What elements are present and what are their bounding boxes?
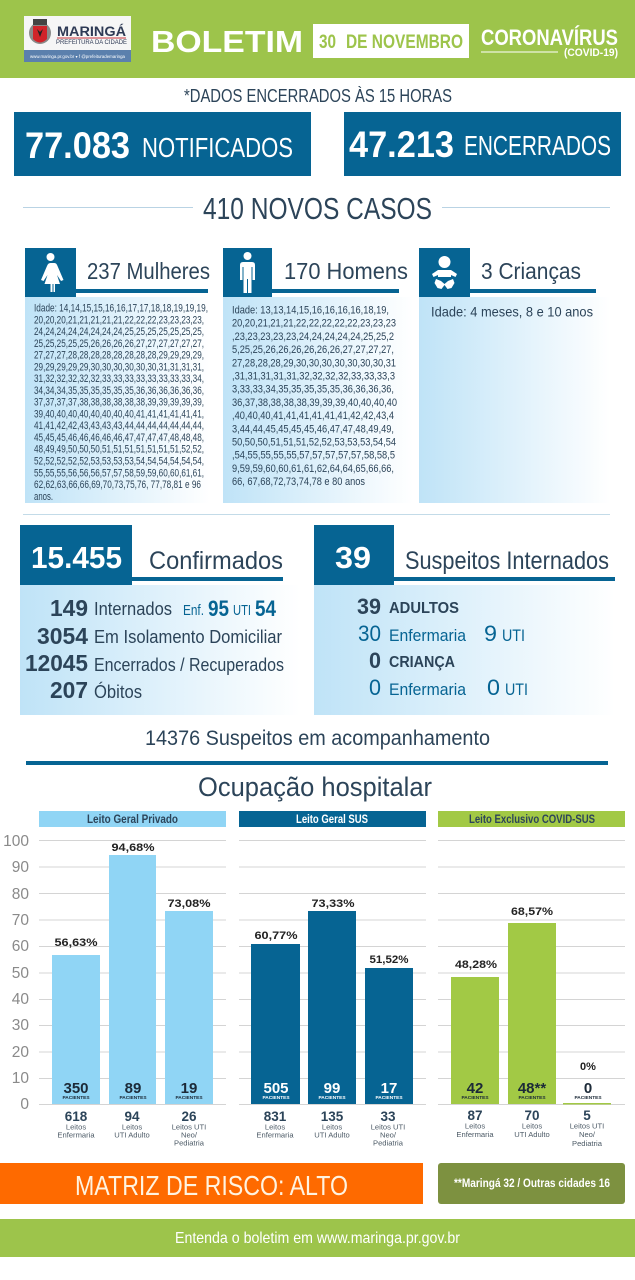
text: ages of women: 20,20,20,21,21,21,21,21,22,22,22,23,23,23,23, (34, 314, 204, 326)
chart axis labels: 10 (12, 1070, 29, 1087)
chart: leito exclusivo COVID-SUS: 48** (518, 1080, 546, 1097)
chart: leito geral SUS: 73,33% (312, 898, 355, 910)
text: ages of men: 5,25,25,26,26,26,26,26,26,27,27,27,27, (232, 344, 394, 356)
panel: crianças (419, 248, 610, 503)
chart: leito geral privado: Leitos (66, 1122, 86, 1132)
chart axis labels: 100 (3, 833, 29, 850)
chart: leito exclusivo COVID-SUS: Neo/ (579, 1130, 596, 1139)
row: criança: 0 (369, 648, 381, 673)
panel: encerrados: 47.213 (349, 124, 454, 165)
panel: confirmados (20, 525, 300, 715)
chart: leito exclusivo COVID-SUS (438, 811, 625, 1148)
chart: leito geral privado: 618 (65, 1109, 88, 1124)
chart axis labels: 20 (12, 1044, 29, 1061)
chart: leito exclusivo COVID-SUS: UTI Adulto (514, 1130, 550, 1139)
icon: baby (432, 256, 457, 289)
text: ages of men: 27,28,28,28,29,30,30,30,30,30,30,30,31 (232, 357, 396, 369)
text: ages of men (232, 304, 397, 488)
chart: leito geral privado: Enfermaria (57, 1130, 95, 1140)
coronavirus label: (COVID-19) (564, 47, 618, 59)
chart: leito geral privado: Neo/ (181, 1130, 198, 1140)
chart: leito geral SUS: 135 (321, 1109, 344, 1124)
row: internados: UTI (233, 602, 251, 619)
row: criança enfermaria e UTI: 0 (369, 675, 381, 700)
logo: Prefeitura de Maringá: PREFEITURA DA CIDADE (56, 39, 127, 46)
chart: leito geral SUS: Pediatria (373, 1138, 404, 1148)
logo: Prefeitura de Maringá (24, 16, 131, 62)
chart axis labels: 70 (12, 912, 29, 929)
row: criança enfermaria e UTI: Enfermaria (389, 680, 467, 699)
chart: leito geral SUS: Neo/ (380, 1130, 397, 1140)
row: adultos enfermaria e UTI: 30 (358, 621, 381, 646)
row: criança (369, 648, 455, 673)
row: internados: 149 (50, 595, 88, 621)
chart: leito exclusivo COVID-SUS: 68,57% (511, 906, 553, 918)
chart: leito geral SUS: Enfermaria (256, 1130, 294, 1140)
text: ages of men: ,23,23,23,23,23,24,24,24,24,24,25,25,2 (232, 331, 394, 343)
note: data closing time: *DADOS ENCERRADOS ÀS 15 HORAS (184, 86, 452, 106)
heading: 237 mulheres: 237 Mulheres (87, 258, 210, 284)
row: adultos enfermaria e UTI: UTI (502, 626, 525, 645)
row: adultos: 39 (357, 594, 381, 619)
chart: leito exclusivo COVID-SUS: Enfermaria (456, 1130, 494, 1139)
coronavirus label (481, 25, 618, 59)
chart axis labels (3, 833, 29, 1113)
row: óbitos: Óbitos (94, 681, 142, 702)
panel: notificados: 77.083 (25, 125, 130, 166)
text: ages of children: Idade: 4 meses, 8 e 10 anos (431, 304, 593, 320)
text: ages of men: ,31,31,31,31,31,32,32,32,32,33,33,33,3 (232, 370, 395, 382)
chart: leito geral SUS: Leitos UTI (371, 1122, 405, 1132)
footer band (0, 1219, 635, 1257)
text: ages of women (34, 302, 208, 503)
chart axis labels: 0 (20, 1096, 29, 1113)
chart: leito geral SUS: PACIENTES (318, 1095, 346, 1101)
row: encerrados: 12045 (25, 650, 88, 676)
chart: leito exclusivo COVID-SUS: 0 (584, 1080, 592, 1097)
chart: leito geral SUS: 51,52% (370, 954, 409, 966)
chart: leito geral privado: Pediatria (174, 1138, 205, 1148)
date box: 30 (319, 32, 336, 53)
figure: 39: 39 (335, 540, 371, 575)
panel: notificados (14, 112, 311, 176)
text: ages of men: ,54,55,55,55,55,57,57,57,57,57,58,58,5 (232, 450, 395, 462)
row: internados: Internados (94, 599, 172, 619)
header band (0, 0, 635, 78)
row: adultos: ADULTOS (389, 600, 459, 617)
row: criança enfermaria e UTI: UTI (505, 680, 528, 699)
chart: leito geral SUS: UTI Adulto (314, 1130, 350, 1140)
row: isolamento (37, 623, 282, 649)
chart: leito geral privado: PACIENTES (175, 1095, 203, 1101)
text: ages of men: ,40,40,40,41,41,41,41,41,41,42,42,43,4 (232, 410, 394, 422)
chart: leito exclusivo COVID-SUS: Pediatria (572, 1139, 603, 1148)
banner: matriz de risco (0, 1163, 423, 1204)
row: adultos enfermaria e UTI: 9 (484, 621, 497, 646)
chart: leito geral privado: 89 (125, 1080, 141, 1097)
chart: leito geral privado: Leitos (122, 1122, 142, 1132)
text: ages of women: 29,29,29,29,29,30,30,30,30,30,30,31,31,31,31, (34, 361, 204, 373)
footer band: Entenda o boletim em www.maringa.pr.gov.br (175, 1230, 461, 1247)
row: internados: 95 (208, 596, 229, 621)
text: ages of women: 27,27,27,28,28,28,28,28,28,28,28,29,29,29,29, (34, 350, 204, 362)
row: encerrados (25, 650, 284, 676)
chart: leito geral privado: Leitos UTI (172, 1122, 206, 1132)
chart: leito geral privado: 350 (63, 1080, 89, 1097)
row: internados: 54 (255, 596, 277, 621)
heading: suspeitos internados: Suspeitos Internados (405, 547, 609, 575)
chart axis labels: 40 (12, 991, 29, 1008)
chart: leito geral privado: Leito Geral Privado (87, 812, 178, 826)
chart: leito geral SUS: 60,77% (254, 930, 298, 942)
chart: leito geral SUS: Leitos (265, 1122, 285, 1132)
text: ages of men: 20,20,21,21,21,22,22,22,22,22,23,23,23 (232, 318, 396, 330)
row: adultos (357, 594, 459, 619)
chart: leito geral SUS: 505 (263, 1080, 289, 1097)
chart axis labels: 60 (12, 938, 29, 955)
text: ages of men: 3,33,33,34,35,35,35,35,35,36,36,36,36, (232, 384, 394, 396)
heading: 170 homens: 170 Homens (284, 258, 408, 284)
chart: leito geral privado: 94 (124, 1109, 140, 1124)
text: ages of women: 48,49,49,50,50,50,51,51,51,51,51,51,51,52,52, (34, 444, 204, 456)
row: adultos enfermaria e UTI (358, 621, 525, 646)
panel: homens (223, 248, 413, 503)
figure: 15.455: 15.455 (31, 540, 122, 575)
logo: Prefeitura de Maringá: MARINGÁ (57, 24, 126, 39)
text: ages of men: Idade: 13,13,14,15,16,16,16,16,18,19, (232, 304, 389, 316)
text: ages of women: 41,41,42,42,43,43,43,43,44,44,44,44,44,44,44, (34, 420, 204, 432)
logo: Prefeitura de Maringá: www.maringa.pr.gov.br ▾ f @prefeiturademaringa (30, 54, 126, 59)
chart: leito exclusivo COVID-SUS: 5 (583, 1108, 591, 1123)
text: ages of women: 62,62,63,66,66,69,70,73,75,76, 77,78,81 e 96 (34, 479, 201, 491)
chart: leito exclusivo COVID-SUS: Leito Exclusivo COVID-SUS (469, 812, 595, 826)
chart: leito geral SUS: Leitos (322, 1122, 342, 1132)
chart: leito exclusivo COVID-SUS: PACIENTES (574, 1095, 602, 1101)
row: óbitos: 207 (50, 677, 88, 703)
chart: leito geral privado: PACIENTES (62, 1095, 90, 1101)
chart: leito geral SUS: 831 (264, 1109, 287, 1124)
text: suspeitos em acompanhamento: 14376 Suspeitos em acompanhamento (145, 727, 490, 750)
chart: leito exclusivo COVID-SUS: PACIENTES (461, 1095, 489, 1101)
date box (313, 24, 469, 58)
chart: leito geral privado: PACIENTES (119, 1095, 147, 1101)
chart: leito exclusivo COVID-SUS: 0% (580, 1061, 596, 1073)
row: criança enfermaria e UTI: 0 (487, 675, 500, 700)
heading: ocupação hospitalar: Ocupação hospitalar (198, 772, 432, 802)
row: isolamento: 3054 (37, 623, 88, 649)
chart: leito exclusivo COVID-SUS: Leitos UTI (570, 1122, 604, 1130)
text: ages of women: 39,40,40,40,40,40,40,40,40,41,41,41,41,41,41, (34, 408, 204, 420)
heading: confirmados: Confirmados (149, 547, 283, 575)
panel: suspeitos internados (314, 525, 615, 715)
callout: Maringá e outras cidades: **Maringá 32 / Outras cidades 16 (454, 1178, 610, 1190)
heading: novos casos: 410 NOVOS CASOS (203, 191, 432, 226)
row: óbitos (50, 677, 142, 703)
text: ages of men: 3,44,44,45,45,45,45,46,47,47,48,49,49, (232, 423, 394, 435)
chart: leito geral SUS (239, 811, 426, 1148)
text: ages of men: 9,59,59,60,60,61,61,62,64,64,65,66,66, (232, 463, 394, 475)
chart: leito exclusivo COVID-SUS: 48,28% (455, 959, 497, 971)
chart axis labels: 90 (12, 859, 29, 876)
chart: leito geral SUS: 99 (324, 1080, 340, 1097)
panel: notificados: NOTIFICADOS (142, 132, 293, 163)
text: ages of men: 36,37,38,38,38,38,39,39,39,40,40,40,40 (232, 397, 397, 409)
row: internados (50, 595, 277, 621)
text: ages of women: 45,45,45,46,46,46,46,46,47,47,47,47,48,48,48, (34, 432, 204, 444)
chart: leito geral privado: 56,63% (54, 937, 98, 949)
text: ages of women: 31,32,32,32,32,32,33,33,33,33,33,33,33,33,34, (34, 373, 204, 385)
chart: leito geral SUS: Leito Geral SUS (296, 812, 368, 826)
date box: DE NOVEMBRO (346, 32, 463, 53)
chart: leito exclusivo COVID-SUS: Leitos (465, 1122, 485, 1130)
chart: leito exclusivo COVID-SUS: 70 (524, 1108, 540, 1123)
chart: leito geral SUS: 17 (381, 1080, 397, 1097)
callout: Maringá e outras cidades (438, 1163, 625, 1204)
chart: leito geral privado: UTI Adulto (114, 1130, 150, 1140)
panel: mulheres (25, 248, 210, 503)
row: criança enfermaria e UTI (369, 675, 528, 700)
chart: leito geral privado: 26 (181, 1109, 197, 1124)
chart: leito exclusivo COVID-SUS: 42 (467, 1080, 483, 1097)
chart: leito exclusivo COVID-SUS: 87 (467, 1108, 483, 1123)
icon: woman (41, 253, 64, 292)
chart: leito geral privado: 73,08% (168, 898, 211, 910)
chart: leito exclusivo COVID-SUS: PACIENTES (518, 1095, 546, 1101)
heading: 3 crianças: 3 Crianças (481, 258, 581, 284)
chart: leito geral privado (39, 811, 226, 1148)
chart: leito geral SUS: PACIENTES (375, 1095, 403, 1101)
chart axis labels: 50 (12, 965, 29, 982)
text: ages of women: 37,37,37,37,38,38,38,38,38,38,39,39,39,39,39, (34, 397, 204, 409)
title: Boletim: BOLETIM (151, 24, 303, 59)
text: ages of women: 25,25,25,25,25,26,26,26,26,27,27,27,27,27,27, (34, 338, 204, 350)
chart: leito geral privado: 94,68% (112, 842, 155, 854)
text: ages of women: 34,34,34,35,35,35,35,35,35,36,36,36,36,36,36, (34, 385, 204, 397)
text: ages of women: 55,55,55,56,56,56,57,57,58,59,59,60,60,61,61, (34, 467, 204, 479)
chart: leito geral SUS: 33 (380, 1109, 396, 1124)
panel: encerrados (344, 112, 621, 176)
chart axis labels: 30 (12, 1017, 29, 1034)
row: criança: CRIANÇA (389, 654, 455, 671)
text: ages of men: 50,50,50,51,51,51,52,52,53,53,53,54,54 (232, 436, 396, 448)
text: ages of women: Idade: 14,14,15,15,16,16,17,17,18,18,19,19,19, (34, 302, 208, 314)
icon: man (240, 252, 255, 293)
row: isolamento: Em Isolamento Domiciliar (94, 627, 282, 647)
text: ages of men: 66, 67,68,72,73,74,78 e 80 anos (232, 476, 366, 488)
text: ages of women: anos. (34, 491, 53, 503)
banner: matriz de risco: MATRIZ DE RISCO: ALTO (75, 1170, 348, 1201)
row: encerrados: Encerrados / Recuperados (94, 655, 284, 675)
text: ages of women: 24,24,24,24,24,24,24,24,25,25,25,25,25,25,25, (34, 326, 204, 338)
row: internados: Enf. (183, 602, 204, 619)
chart: leito geral privado: 19 (181, 1080, 197, 1097)
row: adultos enfermaria e UTI: Enfermaria (389, 626, 467, 645)
chart axis labels: 80 (12, 886, 29, 903)
chart: leito exclusivo COVID-SUS: Leitos (522, 1122, 542, 1130)
chart: leito geral SUS: PACIENTES (262, 1095, 290, 1101)
text: ages of women: 52,52,52,52,52,53,53,53,53,54,54,54,54,54,54, (34, 456, 204, 468)
